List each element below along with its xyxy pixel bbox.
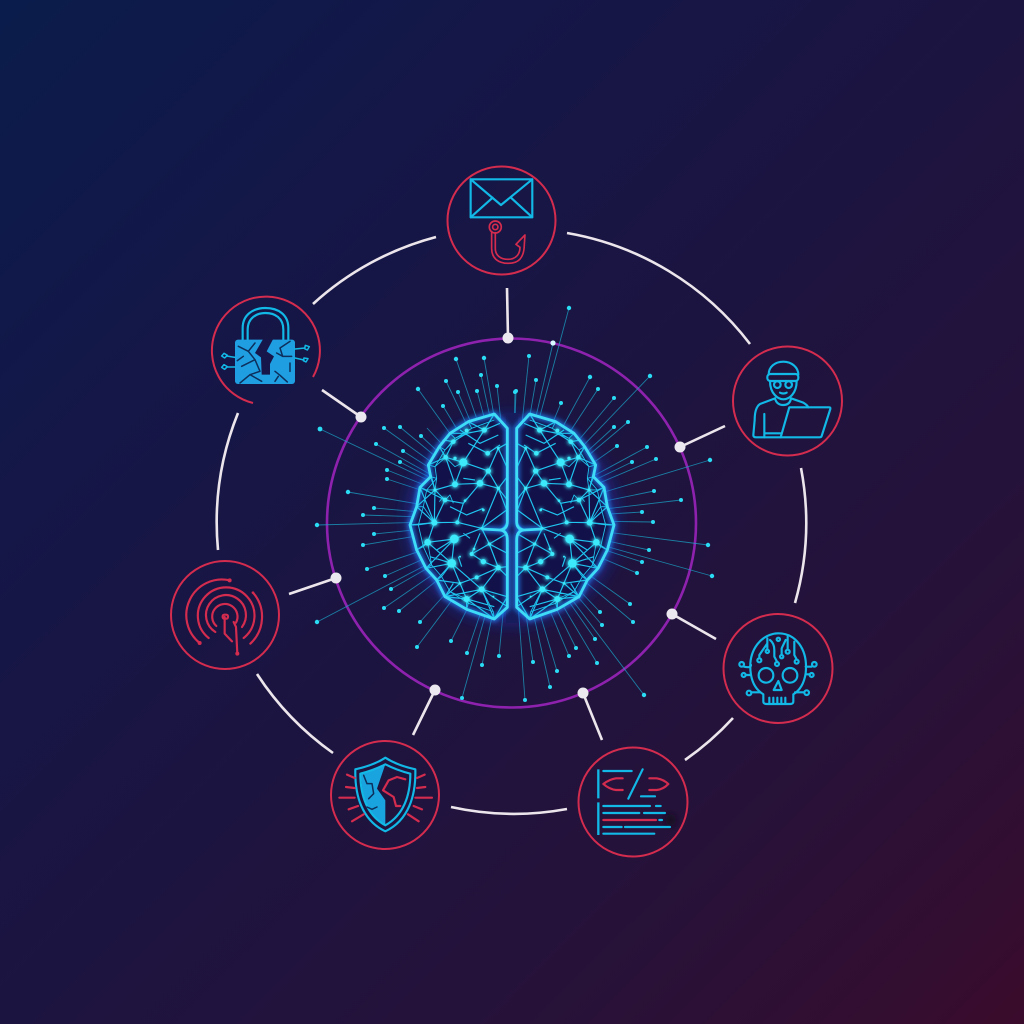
icon: phishing email (448, 166, 556, 274)
brain (410, 413, 614, 623)
icon: broken shield (331, 741, 439, 849)
brain glow (396, 406, 628, 634)
icon: hacker at laptop (733, 346, 842, 456)
outer segmented ring (217, 233, 806, 814)
icon: circuit skull (724, 614, 832, 723)
radiating data lines (315, 306, 714, 702)
left hemisphere (410, 414, 507, 619)
connectors (289, 288, 725, 740)
icon: signal rings (171, 561, 279, 669)
connector nodes (330, 332, 686, 698)
purple inner ring (327, 338, 696, 708)
right hemisphere (517, 414, 614, 619)
icon: cracked padlock (212, 297, 320, 403)
gap between hemispheres (506, 413, 518, 623)
icon: malicious code (578, 748, 688, 856)
